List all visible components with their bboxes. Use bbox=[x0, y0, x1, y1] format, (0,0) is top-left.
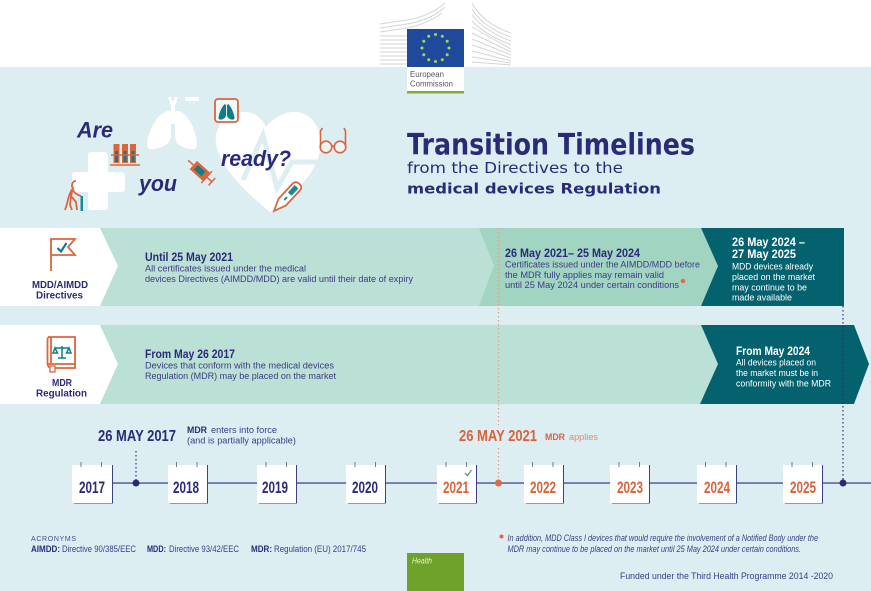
icon: flag with check bbox=[51, 239, 75, 271]
text: from May 2024: conformity with the MDR bbox=[736, 378, 831, 388]
calendar: 2018 bbox=[168, 462, 208, 504]
footnote asterisk bbox=[500, 534, 504, 538]
label: MDR Regulation: MDR bbox=[52, 378, 73, 389]
acronyms list: MDD: bbox=[147, 544, 166, 554]
icon: white cross bbox=[72, 152, 125, 210]
label: MDR enters into force: MDR bbox=[187, 425, 207, 435]
icon: law book with scales bbox=[48, 337, 75, 372]
label: MDD/AIMDD Directives: Directives bbox=[36, 290, 83, 302]
icon: lungs in frame bbox=[215, 99, 238, 122]
band: from May 26 2017 bbox=[100, 325, 718, 404]
acronyms bbox=[31, 536, 366, 554]
text: ready?: ready? bbox=[221, 146, 291, 171]
text: you: you bbox=[138, 171, 178, 196]
acronyms list: MDR: bbox=[251, 544, 272, 554]
text: 26 May 2024 to 27 May 2025: MDD devices already bbox=[732, 262, 813, 272]
icon: white heart with pulse bbox=[216, 112, 324, 212]
footnote bbox=[500, 533, 818, 554]
label: MDR applies: applies bbox=[569, 432, 598, 443]
text: from May 2024: the market must be in bbox=[736, 368, 818, 378]
label: 26 May 2017: 26 MAY 2017 bbox=[98, 428, 176, 445]
label: 26 May 2021: 26 MAY 2021 bbox=[459, 428, 537, 445]
acronyms list: Regulation (EU) 2017/745 bbox=[274, 544, 366, 554]
text: from May 26 2017: Devices that conform with the medical devices bbox=[145, 360, 334, 370]
text: 26 May 2021 to 25 May 2024: 26 May 2021– 25 May 2024 bbox=[505, 248, 641, 260]
asterisk bbox=[681, 279, 685, 283]
panel: MDR Regulation row bbox=[0, 325, 869, 404]
label: MDR enters into force: (and is partially applicable) bbox=[187, 436, 296, 446]
text: 26 May 2021 to 25 May 2024: until 25 May 2024 under certain conditions bbox=[505, 280, 680, 290]
calendar: 2019: 2019 bbox=[262, 478, 288, 497]
text: 26 May 2021 to 25 May 2024: Certificates issued under the AIMDD/MDD before bbox=[505, 260, 700, 270]
text: from May 26 2017: From May 26 2017 bbox=[145, 349, 235, 361]
text: from May 26 2017: Regulation (MDR) may be placed on the market bbox=[145, 371, 336, 381]
label: MDR enters into force: enters into force bbox=[211, 425, 277, 435]
marker: 26 May 2017 bbox=[132, 480, 140, 486]
calendar: 2018: 2018 bbox=[173, 478, 199, 497]
acronyms list: Directive 93/42/EEC bbox=[169, 544, 239, 554]
text: until 25 May 2021: All certificates issued under the medical bbox=[145, 264, 306, 274]
calendar: 2024: 2024 bbox=[704, 478, 730, 497]
icon: Berlaymont building bbox=[380, 3, 511, 65]
label: MDR applies: MDR bbox=[545, 432, 565, 443]
label: MDD/AIMDD Directives: MDD/AIMDD bbox=[32, 280, 88, 291]
marker: 2025 bbox=[840, 480, 846, 486]
calendar: 2017 bbox=[72, 462, 113, 504]
calendar: 2017: 2017 bbox=[79, 478, 105, 497]
band: 26 May 2024 to 27 May 2025 bbox=[701, 228, 844, 306]
icon: EU flag bbox=[407, 29, 464, 67]
panel: MDD/AIMDD Directives row bbox=[0, 228, 844, 306]
acronyms list: AIMDD: bbox=[31, 544, 60, 554]
band: 26 May 2021 to 25 May 2024 bbox=[479, 228, 718, 306]
health badge: Health bbox=[412, 556, 432, 566]
text: until 25 May 2021: devices Directives (AIMDD/MDD) are valid until their date of expiry bbox=[145, 274, 413, 284]
logo: European Commission bbox=[380, 3, 511, 94]
dotted connector: 2021 bbox=[498, 228, 500, 482]
text: 26 May 2024 to 27 May 2025: may continue to be bbox=[732, 282, 807, 292]
label chevron: Directives bbox=[0, 228, 118, 306]
title bbox=[407, 128, 695, 198]
text: from May 2024: All devices placed on bbox=[736, 358, 816, 368]
text: Are: Are bbox=[76, 118, 113, 142]
title: from the Directives to the bbox=[407, 159, 623, 177]
dotted connector: 2017 bbox=[135, 451, 137, 482]
calendar: 2025: 2025 bbox=[790, 478, 816, 497]
calendar: 2022 bbox=[524, 462, 564, 504]
acronyms heading: ACRONYMS bbox=[31, 536, 76, 543]
icon: syringe bbox=[183, 154, 217, 188]
calendar: 2024 bbox=[697, 462, 737, 504]
text: 26 May 2024 to 27 May 2025: placed on the market bbox=[732, 272, 815, 282]
timeline axis bbox=[112, 482, 871, 484]
icon: elderly person with cane bbox=[65, 181, 83, 211]
calendar: 2021: 2021 bbox=[443, 478, 469, 497]
band: from May 2024 bbox=[700, 325, 869, 404]
icon: white lungs bbox=[147, 97, 199, 149]
timeline bbox=[72, 228, 871, 504]
dotted connector: 2025 bbox=[842, 306, 844, 482]
footnote text: MDR may continue to be placed on the market until 25 May 2024 under certain conditions. bbox=[508, 544, 801, 554]
calendar: 2021 bbox=[437, 462, 477, 504]
label chevron: Regulation bbox=[0, 325, 118, 404]
calendar: 2022: 2022 bbox=[530, 478, 556, 497]
calendar: 2023 bbox=[610, 462, 650, 504]
health badge bbox=[407, 553, 464, 591]
icon: glasses bbox=[320, 128, 346, 153]
icon: test tubes bbox=[110, 144, 140, 165]
calendar: 2019 bbox=[257, 462, 297, 504]
calendar: 2025 bbox=[783, 462, 823, 504]
text: 26 May 2024 to 27 May 2025: made available bbox=[732, 292, 792, 302]
icon: thermometer bbox=[270, 180, 303, 214]
text: 26 May 2024 to 27 May 2025: 27 May 2025 bbox=[732, 249, 797, 261]
title: medical devices Regulation bbox=[407, 182, 661, 198]
funding note: Funded under the Third Health Programme 2014 -2020 bbox=[620, 571, 833, 581]
text: 26 May 2021 to 25 May 2024: the MDR fully applies may remain valid bbox=[505, 270, 664, 280]
marker: 26 May 2021 bbox=[495, 480, 502, 486]
title: Transition Timelines bbox=[407, 128, 695, 162]
acronyms list: Directive 90/385/EEC bbox=[62, 544, 136, 554]
calendar: 2020 bbox=[346, 462, 386, 504]
logo text: European bbox=[410, 70, 444, 79]
logo text: Commission bbox=[410, 80, 453, 88]
calendar: 2023: 2023 bbox=[617, 478, 643, 497]
illustration: health icons and Are you ready bbox=[65, 97, 346, 214]
text: until 25 May 2021: Until 25 May 2021 bbox=[145, 252, 234, 264]
calendar: 2020: 2020 bbox=[352, 478, 378, 497]
label: MDR Regulation: Regulation bbox=[36, 388, 87, 400]
band: until 25 May 2021 bbox=[100, 228, 500, 306]
text: from May 2024: From May 2024 bbox=[736, 346, 811, 358]
text: 26 May 2024 to 27 May 2025: 26 May 2024 – bbox=[732, 237, 806, 249]
